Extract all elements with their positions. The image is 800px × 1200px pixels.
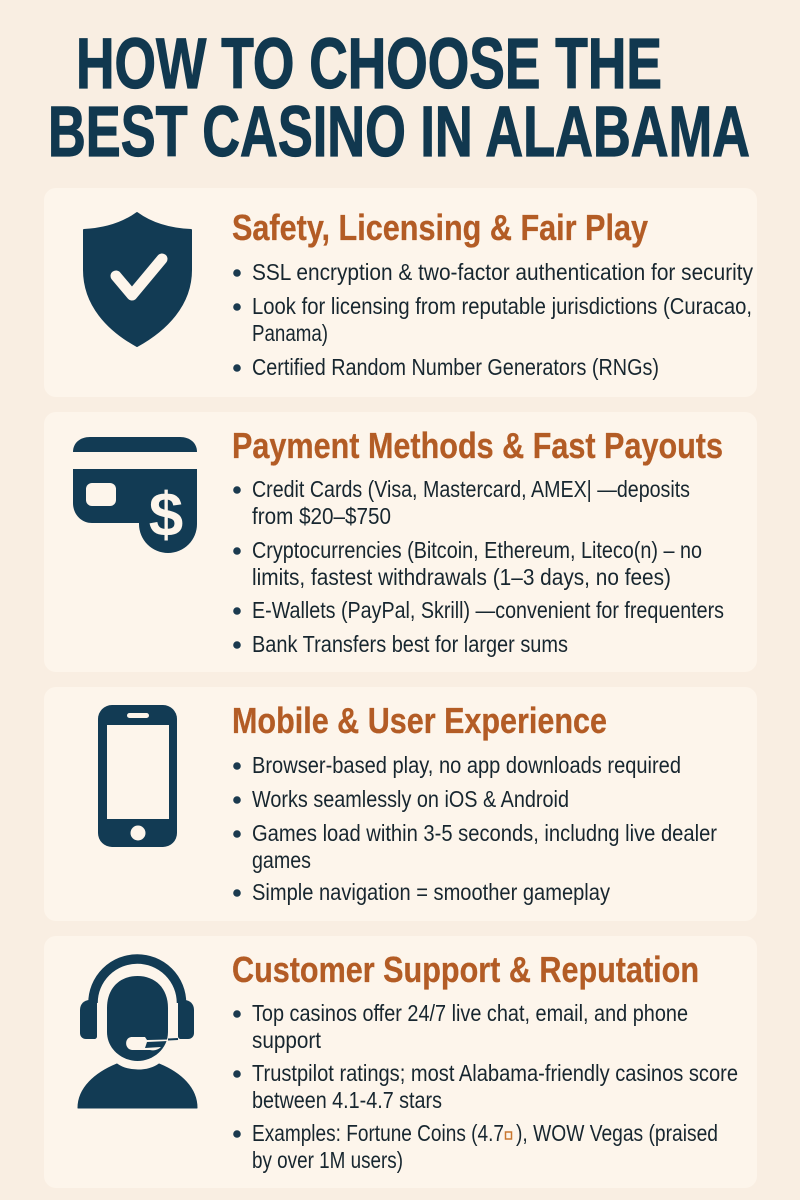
bullet list: mobile: Works seamlessly on iOS & Android [252, 786, 569, 812]
heading: payment: Payment Methods & Fast Payouts [232, 425, 723, 466]
heading: support: Customer Support & Reputation [232, 949, 699, 990]
icon: shield with check [84, 213, 191, 346]
icon: credit card with dollar coin [73, 437, 197, 553]
bullet list: support: Examples: Fortune Coins (4.7 [252, 1120, 504, 1146]
panel: payment methods and fast payouts [44, 412, 757, 672]
bullet list: safety: Panama) [252, 320, 328, 346]
bullet list: mobile: Simple navigation = smoother gameplay [252, 879, 610, 905]
icon: smartphone [98, 705, 177, 847]
panel: mobile and user experience [44, 687, 757, 921]
panel: safety, licensing and fair play [44, 188, 757, 397]
bullet list: support [233, 1000, 738, 1173]
bullet list: support: by over 1M users) [252, 1147, 403, 1173]
bullet list: safety: Certified Random Number Generators (RNGs) [252, 354, 659, 380]
bullet list: payment [233, 476, 724, 657]
bullet list: payment: limits, fastest withdrawals (1–3 days, no fees) [252, 564, 671, 590]
icon: support agent with headset [78, 959, 197, 1108]
bullet list: payment: Bank Transfers best for larger sums [252, 631, 568, 657]
bullet list: payment: from $20–$750 [252, 503, 391, 529]
bullet list: support: support [252, 1027, 322, 1053]
bullet list: mobile [233, 752, 717, 905]
bullet list: support: Top casinos offer 24/7 live chat, email, and phone [252, 1000, 688, 1026]
bullet list: support: between 4.1-4.7 stars [252, 1087, 442, 1113]
icon: credit card with dollar coin: $ [149, 481, 183, 550]
bullet list: payment: Cryptocurrencies (Bitcoin, Ethereum, Liteco(n) – no [252, 537, 702, 563]
bullet list: safety [233, 259, 753, 380]
bullet list: mobile: Browser-based play, no app downloads required [252, 752, 681, 778]
bullet list: support: ), WOW Vegas (praised [516, 1120, 718, 1146]
bullet list: payment: Credit Cards (Visa, Mastercard, AMEX| —deposits [252, 476, 690, 502]
bullet list: mobile: games [252, 847, 311, 873]
heading: safety: Safety, Licensing & Fair Play [232, 207, 648, 248]
heading: mobile: Mobile & User Experience [232, 700, 607, 741]
panel: customer support and reputation [44, 936, 757, 1188]
bullet list: payment: E-Wallets (PayPal, Skrill) —convenient for frequenters [252, 597, 724, 623]
title [48, 25, 750, 172]
bullet list: safety: SSL encryption & two-factor authentication for security [252, 259, 753, 285]
bullet list: support: Trustpilot ratings; most Alabama-friendly casinos score [252, 1060, 738, 1086]
bullet list: mobile: Games load within 3-5 seconds, includng live dealer [252, 820, 717, 846]
